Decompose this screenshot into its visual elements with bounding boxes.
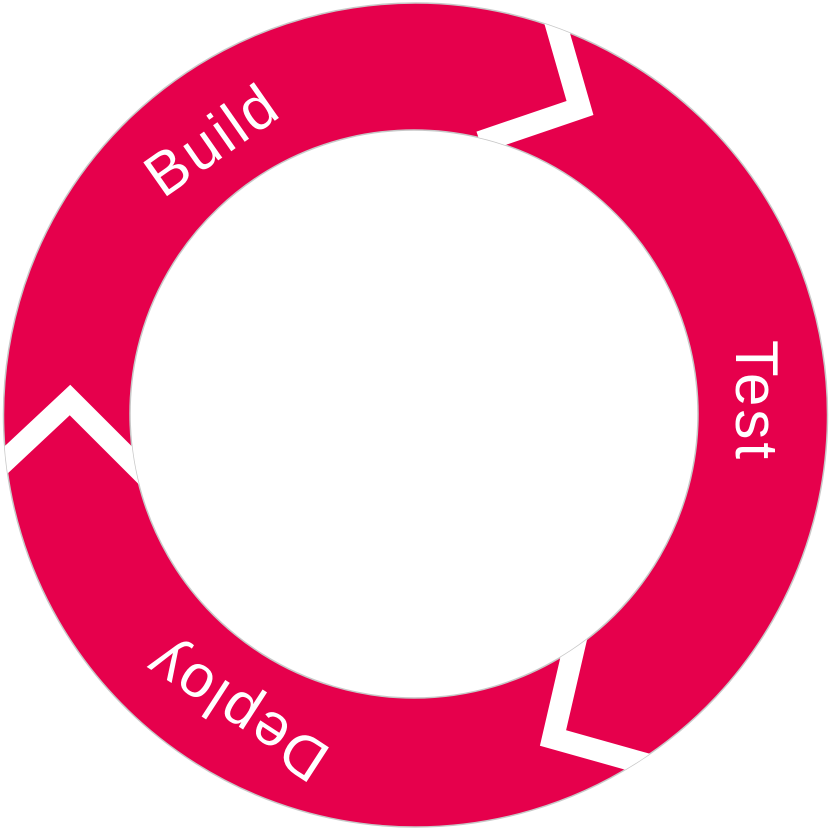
label: Test: Test	[723, 340, 790, 462]
label: Build: Build	[132, 70, 292, 210]
label: Deploy: Deploy	[132, 628, 340, 795]
